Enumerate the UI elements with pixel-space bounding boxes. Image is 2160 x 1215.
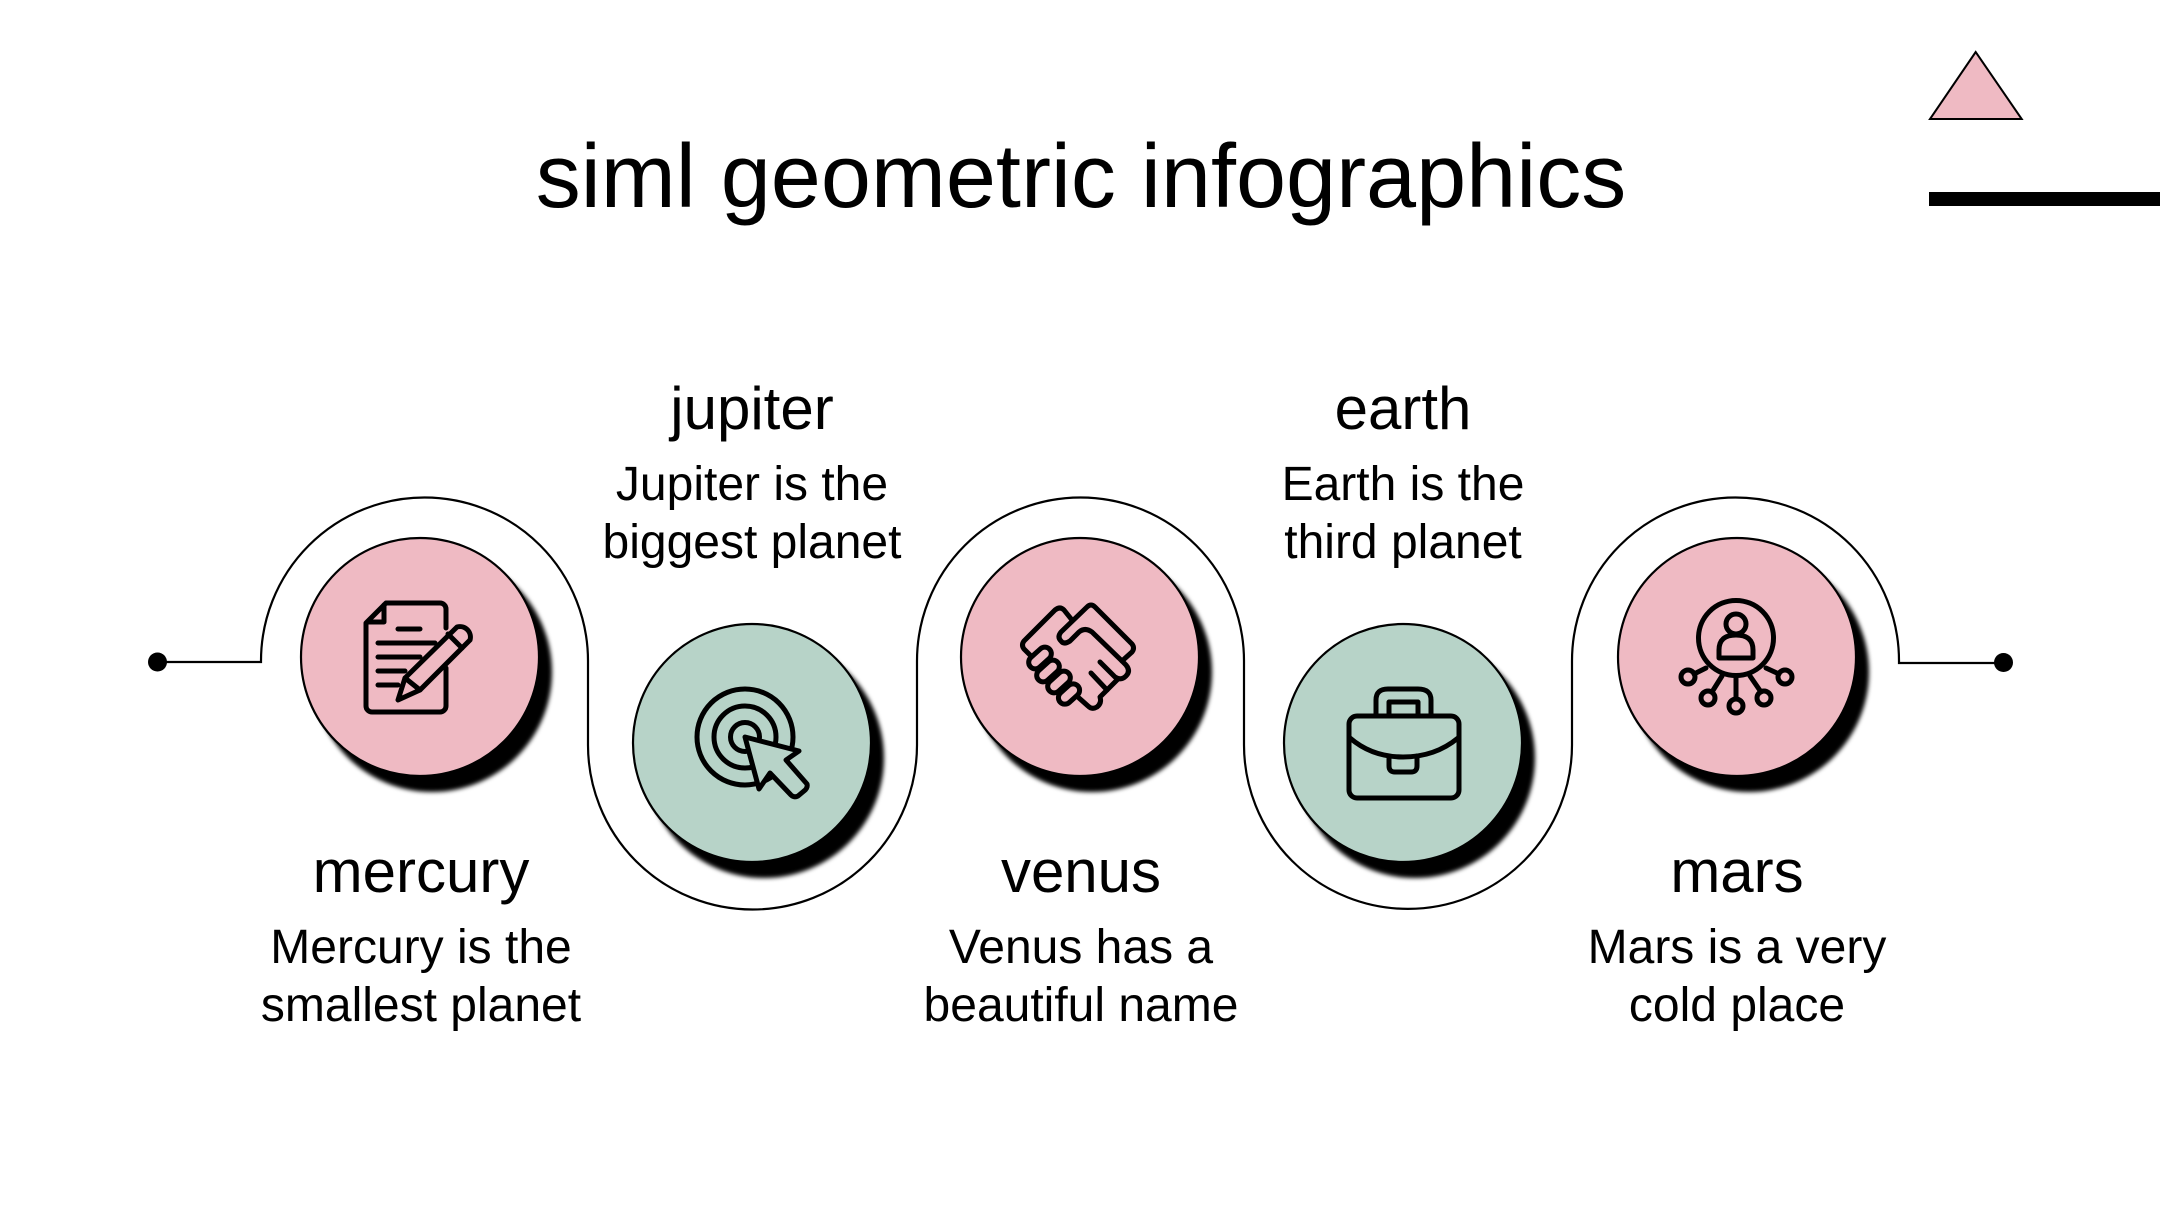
mars description: cold place xyxy=(1629,979,1845,1032)
earth description: third planet xyxy=(1284,516,1522,569)
jupiter circle xyxy=(633,624,871,862)
icon: briefcase xyxy=(1349,689,1459,798)
panel: mars xyxy=(1588,538,1886,1032)
icon: document and pencil xyxy=(366,603,470,712)
venus heading: venus xyxy=(1001,838,1161,905)
icon: handshake xyxy=(1022,605,1134,708)
connector: winding line with end dots xyxy=(148,498,2013,910)
mercury description: Mercury is the xyxy=(270,921,572,974)
panel: earth xyxy=(1282,375,1535,878)
mars circle xyxy=(1618,538,1856,776)
earth shadow xyxy=(1295,638,1535,878)
jupiter description: Jupiter is the xyxy=(616,458,888,511)
jupiter description: biggest planet xyxy=(603,516,901,569)
decoration: black bar xyxy=(1929,192,2160,206)
mars shadow xyxy=(1629,552,1869,792)
mercury shadow xyxy=(312,552,552,792)
mars heading: mars xyxy=(1670,838,1804,905)
decoration: pink triangle xyxy=(1930,52,2022,119)
venus description: beautiful name xyxy=(924,979,1238,1032)
jupiter heading: jupiter xyxy=(668,375,834,442)
jupiter shadow xyxy=(644,638,884,878)
venus circle xyxy=(961,538,1199,776)
earth description: Earth is the xyxy=(1282,458,1524,511)
mercury circle xyxy=(301,538,539,776)
panel: mercury xyxy=(261,538,581,1032)
earth heading: earth xyxy=(1335,375,1471,442)
mercury description: smallest planet xyxy=(261,979,581,1032)
mercury heading: mercury xyxy=(313,838,529,905)
title: siml geometric infographics xyxy=(536,127,1626,227)
venus shadow xyxy=(972,552,1212,792)
icon: target with cursor xyxy=(697,689,807,797)
earth circle xyxy=(1284,624,1522,862)
icon: person network xyxy=(1681,600,1792,713)
panel: jupiter xyxy=(603,375,901,878)
panel: venus xyxy=(924,538,1238,1032)
venus description: Venus has a xyxy=(949,921,1213,974)
mars description: Mars is a very xyxy=(1588,921,1886,974)
